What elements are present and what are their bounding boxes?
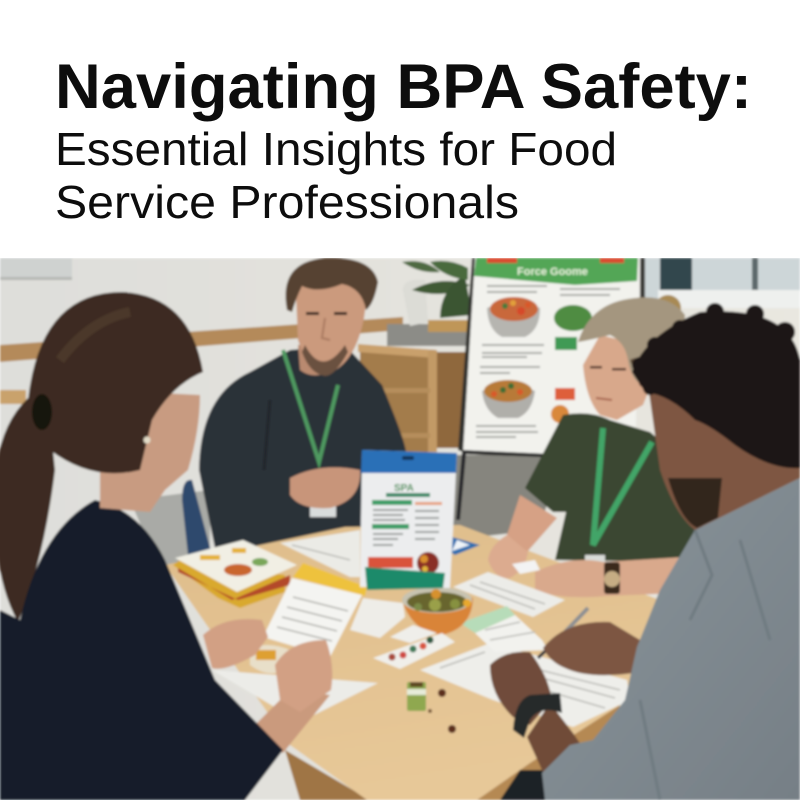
watercolour palette card, snack and beads: [373, 625, 456, 733]
papers on table: [212, 530, 630, 727]
curly hair: [632, 311, 800, 468]
forearm and hand: [526, 708, 580, 771]
heading: main title: Navigating BPA Safety:: [55, 52, 752, 122]
writing hand: [543, 622, 640, 675]
navy top: [0, 500, 283, 800]
face: [648, 385, 800, 530]
title: [55, 52, 752, 228]
blue chair: [182, 480, 212, 555]
face and neck: [100, 392, 200, 512]
wooden shelves: [358, 344, 465, 452]
forearm and hands: [256, 693, 330, 754]
BPA product pouch: SPA: [394, 483, 414, 494]
man in foreground with grey shirt: [490, 303, 800, 800]
face features: [306, 312, 347, 315]
BPA product pouch: [360, 450, 457, 590]
left forearm: [507, 495, 557, 552]
food safety poster on stand: [456, 258, 640, 520]
green lanyard: [283, 350, 338, 462]
napkin: [350, 598, 405, 638]
woman with green shirt: [488, 295, 715, 597]
potted plant: [402, 261, 472, 332]
photo: food service professionals around a table: [0, 258, 800, 800]
ponytail: [0, 398, 55, 622]
grey shirt: [542, 478, 800, 800]
handout held by woman: [250, 578, 362, 673]
food safety poster on stand: Force Goome: [517, 266, 588, 278]
poster bowls of food: [482, 297, 592, 423]
stack of brochures: [173, 540, 297, 608]
hair: [658, 294, 682, 311]
page background: [0, 0, 800, 258]
poster text lines: [476, 285, 620, 438]
snack bowl: [402, 587, 473, 635]
hair: [28, 292, 203, 473]
green lanyard: [593, 428, 652, 545]
table: [165, 525, 660, 800]
dark trousers: [500, 768, 546, 800]
man in dark shirt: [199, 258, 406, 550]
heading: subtitle line two: Service Professionals: [55, 176, 519, 228]
room background: [0, 258, 800, 800]
face: [582, 334, 648, 421]
wristwatch: [513, 693, 562, 738]
pen: [538, 608, 588, 658]
yellow folder: [293, 563, 367, 596]
heading: subtitle line one: Essential Insights for Food: [55, 123, 617, 175]
forearm and watch: [535, 556, 700, 597]
woman in foreground with navy top: [0, 292, 332, 800]
hands: [290, 467, 360, 508]
